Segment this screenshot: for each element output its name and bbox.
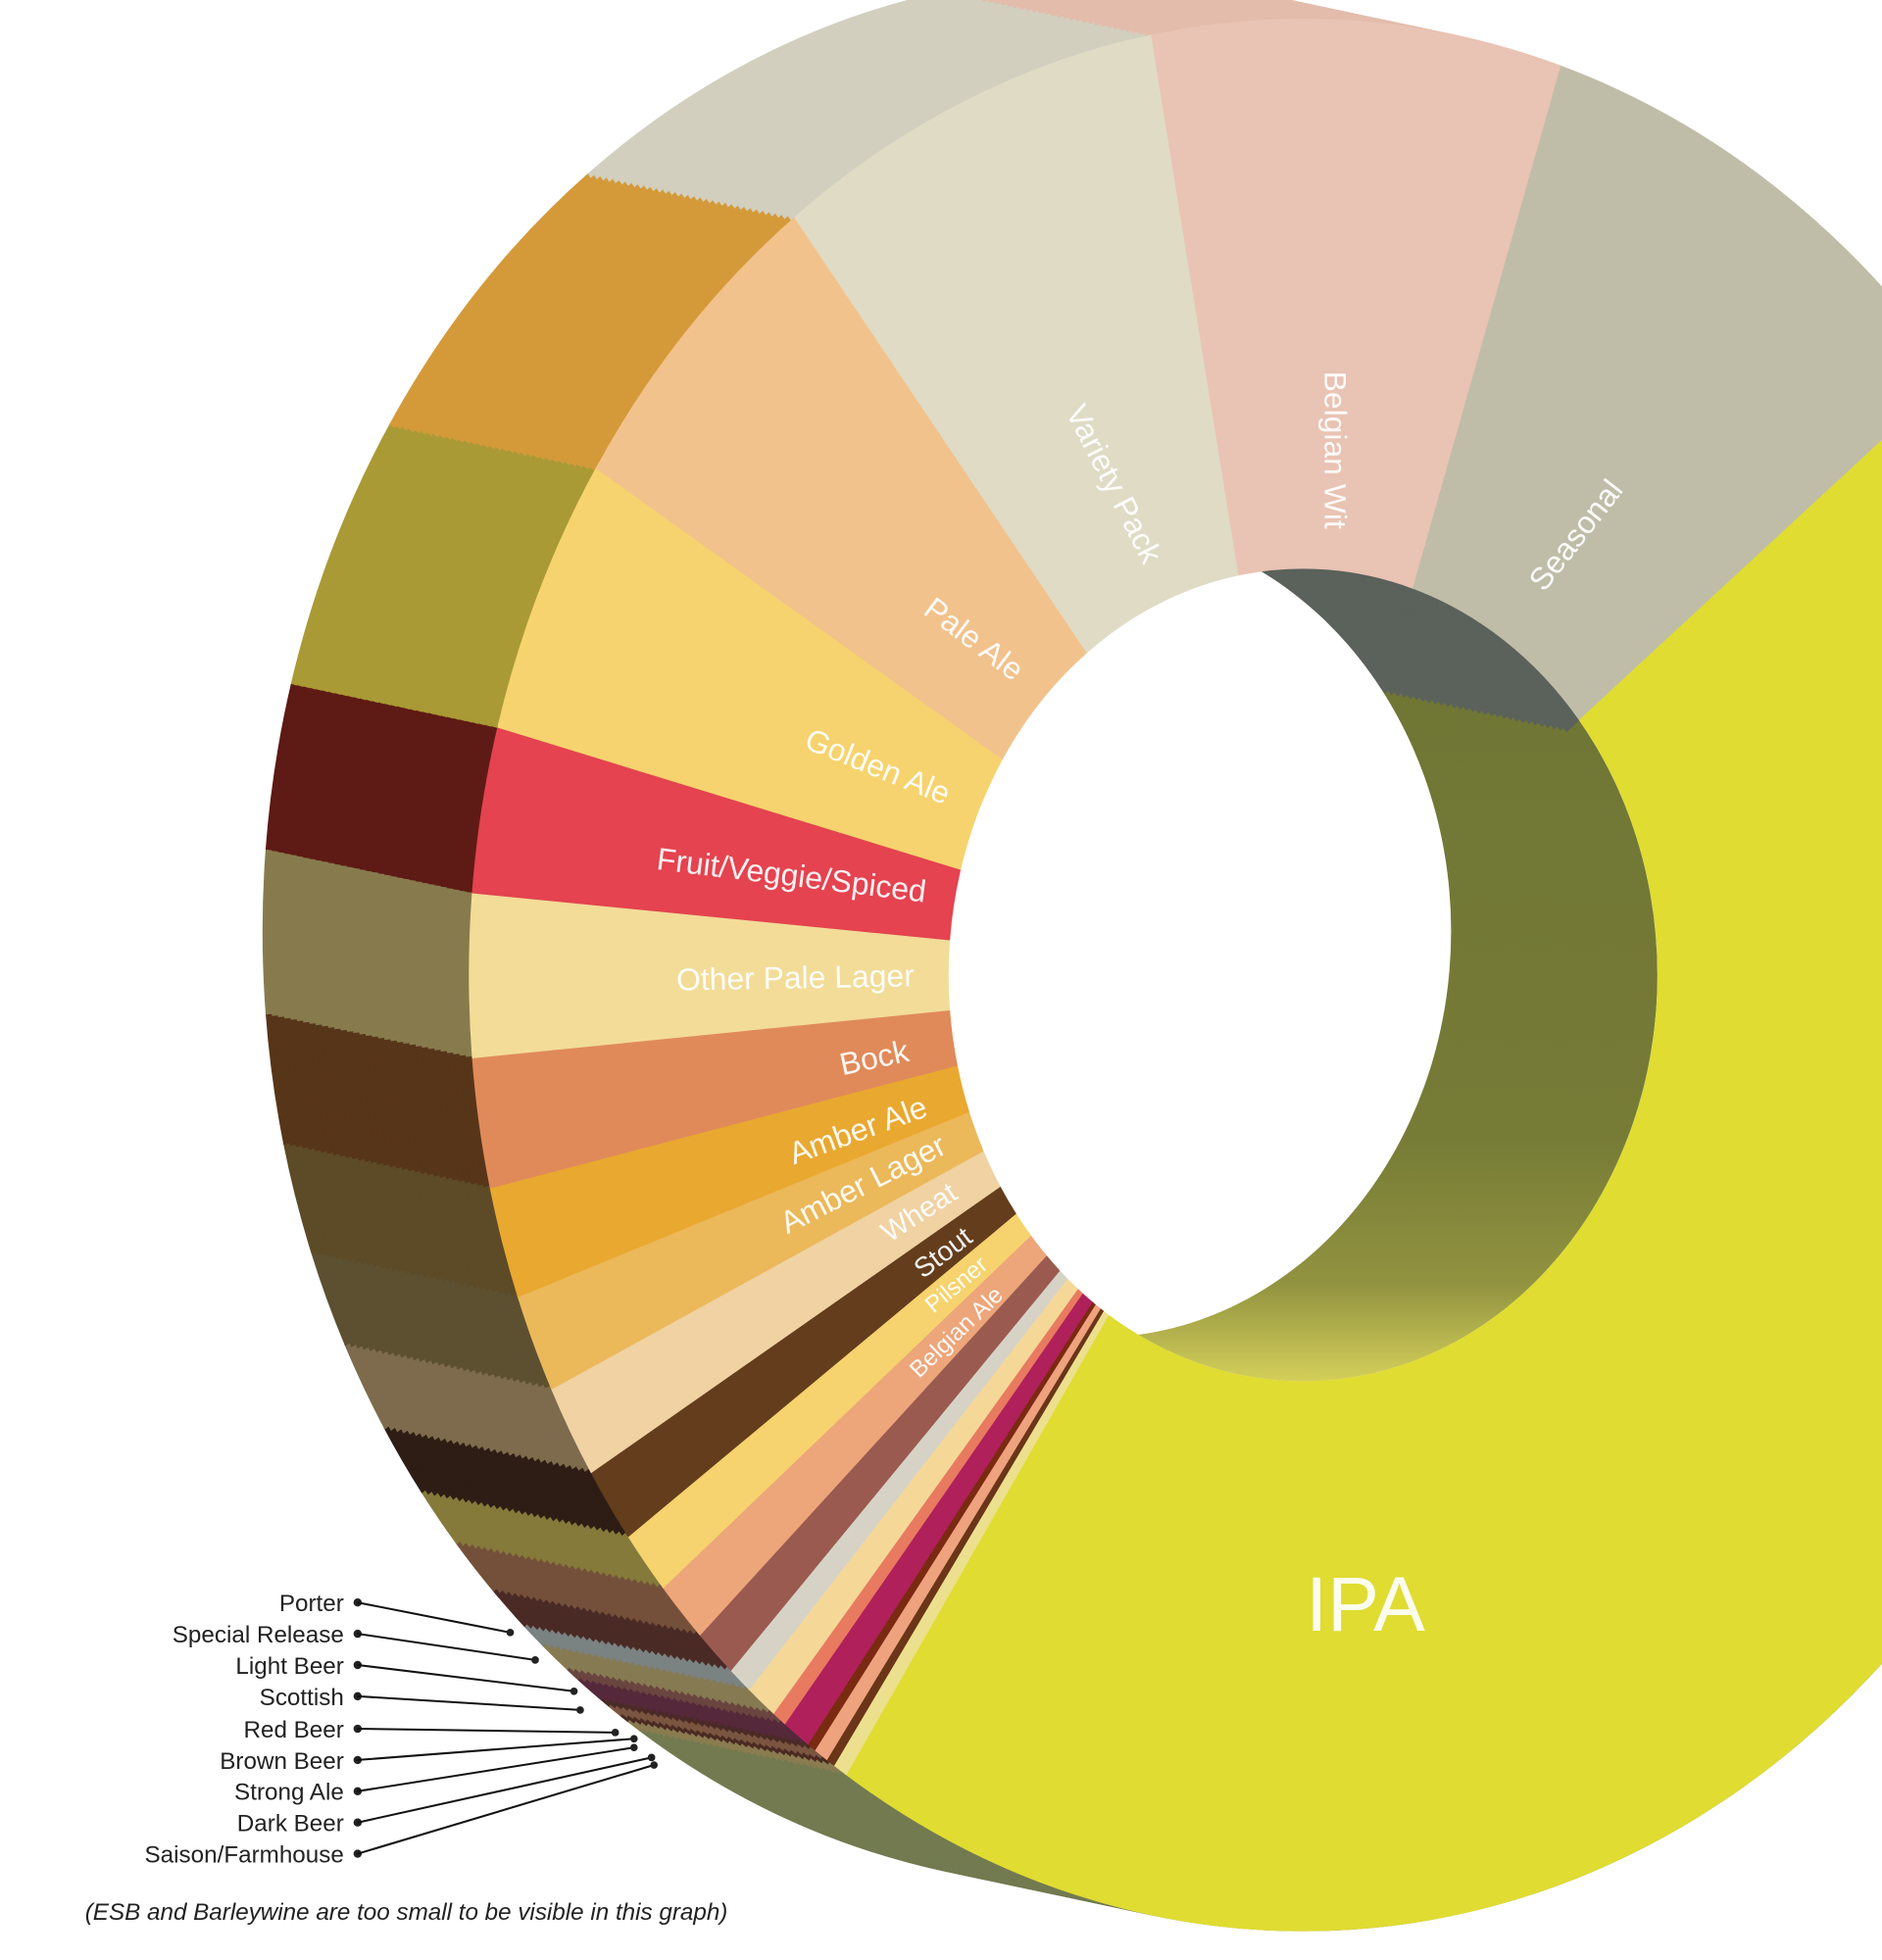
label: Pale Ale: Pale Ale (917, 590, 1030, 687)
callout: Brown Beer (220, 1735, 638, 1775)
label: Seasonal: Seasonal (1521, 472, 1630, 597)
callout: Strong Ale (234, 1743, 638, 1806)
callout: Porter (279, 1591, 514, 1637)
callout: Red Beer (243, 1717, 619, 1743)
label: Amber Ale: Amber Ale (784, 1089, 931, 1171)
label: IPA: IPA (1306, 1560, 1425, 1647)
label: Fruit/Veggie/Spiced: Fruit/Veggie/Spiced (655, 841, 928, 909)
callout: Scottish: Scottish (260, 1685, 344, 1711)
front face slices (463, 12, 1882, 1938)
callouts for tiny slices (145, 1591, 658, 1869)
callout: Special Release: Special Release (173, 1622, 344, 1648)
callout: Light Beer: Light Beer (235, 1653, 344, 1680)
callout: Strong Ale: Strong Ale (234, 1780, 344, 1806)
label: Belgian Wit: Belgian Wit (1317, 371, 1354, 529)
label: Wheat: Wheat (875, 1176, 963, 1249)
label: Pilsner: Pilsner (920, 1251, 993, 1318)
callout: Special Release (173, 1622, 539, 1664)
callout: Saison/Farmhouse (145, 1761, 658, 1869)
label: Golden Ale: Golden Ale (801, 721, 956, 811)
callout: Dark Beer (237, 1754, 655, 1838)
label: Bock: Bock (836, 1033, 912, 1082)
callout: Scottish (260, 1685, 584, 1714)
footnote: (ESB and Barleywine are too small to be visible in this graph) (85, 1899, 727, 1926)
label: Belgian Ale: Belgian Ale (905, 1282, 1009, 1383)
slice labels (655, 371, 1630, 1647)
callout: Porter: Porter (279, 1591, 344, 1617)
inner wall of hole (683, 458, 1716, 1448)
callout: Saison/Farmhouse: Saison/Farmhouse (145, 1842, 344, 1869)
label: Other Pale Lager: Other Pale Lager (676, 957, 915, 998)
label: Amber Lager: Amber Lager (774, 1127, 952, 1241)
label: Variety Pack: Variety Pack (1060, 399, 1169, 568)
label: Stout: Stout (908, 1221, 978, 1284)
callout: Brown Beer: Brown Beer (220, 1748, 344, 1775)
callout: Dark Beer: Dark Beer (237, 1811, 344, 1838)
callout: Light Beer (235, 1653, 577, 1695)
callout: Red Beer: Red Beer (243, 1717, 344, 1743)
